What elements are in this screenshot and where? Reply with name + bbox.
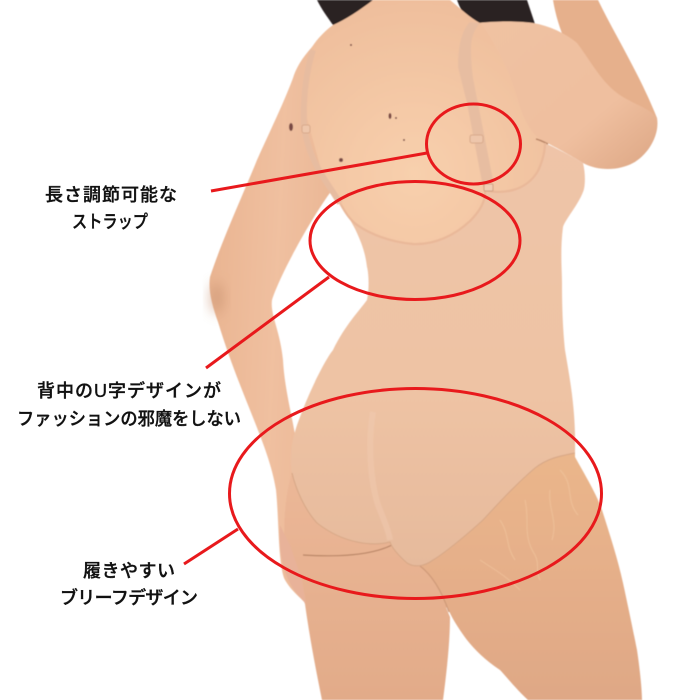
callout circle: brief — [230, 388, 602, 598]
raised forearm — [553, 0, 657, 130]
label: adjustable strap: ストラップ — [72, 212, 148, 232]
brief seam — [292, 453, 575, 566]
right shoulder and upper arm — [478, 22, 657, 169]
back neckline trim — [340, 143, 545, 244]
figure: model from behind — [209, 0, 657, 700]
upper back and neck — [302, 0, 552, 255]
label: adjustable strap: 長さ調節可能な — [45, 185, 177, 205]
label: U back design: 背中のU字デザインが — [37, 380, 221, 401]
leader line: U back — [206, 277, 329, 368]
thigh crease — [420, 566, 449, 612]
buttock crease — [303, 545, 392, 556]
centre seam panel — [370, 412, 390, 540]
armpit crease — [536, 139, 548, 144]
callout circle: strap — [426, 104, 520, 184]
leader line: strap — [211, 153, 427, 191]
callout circle: U back — [310, 182, 520, 300]
moles — [289, 44, 405, 162]
label: adjustable strap — [45, 185, 177, 232]
strap adjuster right — [470, 135, 483, 143]
strap adjuster left — [302, 125, 310, 133]
left leg — [284, 460, 450, 700]
fingers — [280, 525, 306, 604]
right leg — [400, 440, 642, 700]
label: brief design: ブリーフデザイン — [60, 587, 198, 608]
lower strap adjuster — [484, 184, 493, 191]
left strap — [304, 50, 340, 203]
stretch marks — [480, 470, 578, 590]
label: brief design — [60, 561, 198, 608]
leader line: brief — [184, 529, 238, 564]
left arm — [209, 47, 345, 604]
hair — [317, 0, 537, 30]
right strap — [458, 22, 493, 187]
label: U back design — [17, 380, 241, 429]
label: U back design: ファッションの邪魔をしない — [17, 409, 241, 429]
label: brief design: 履きやすい — [83, 561, 175, 581]
bodysuit — [291, 143, 585, 566]
elbow shading — [210, 282, 224, 314]
